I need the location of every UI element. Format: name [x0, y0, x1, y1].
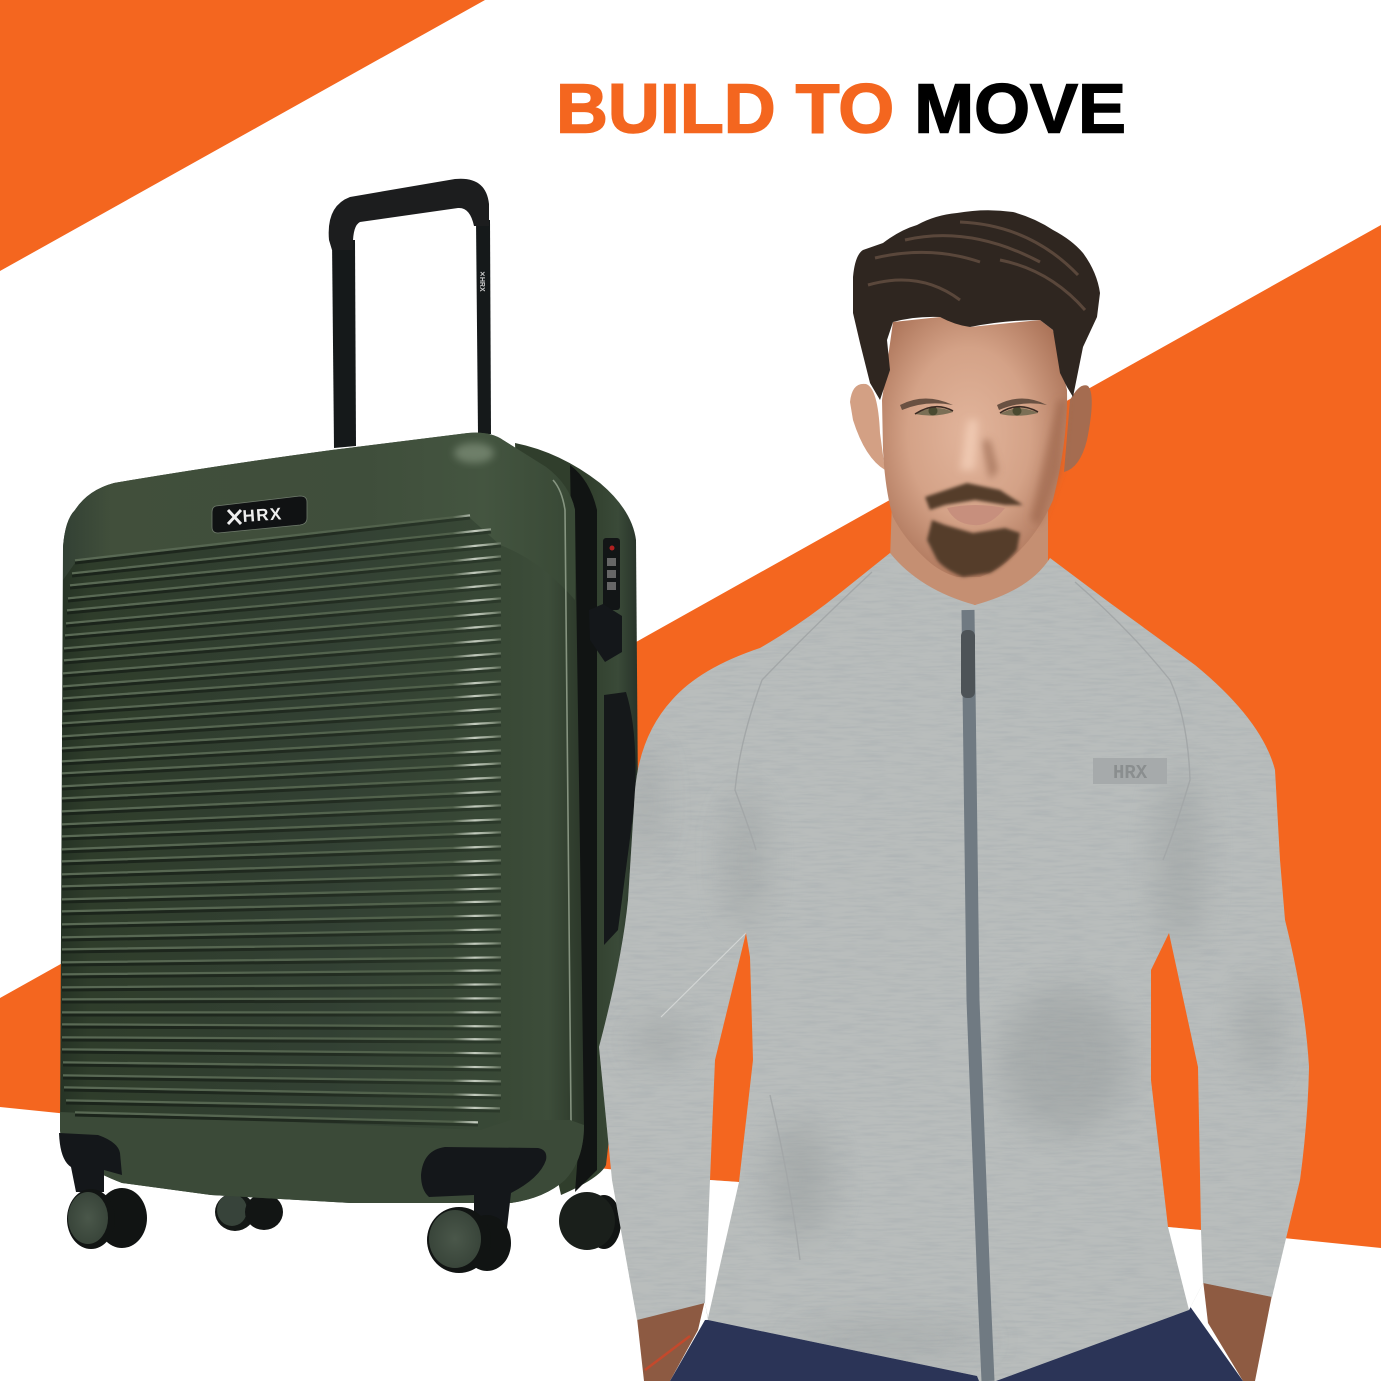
suitcase telescopic handle: ✕HRX [478, 271, 485, 292]
jacket zip [968, 610, 988, 1381]
man hair [853, 210, 1100, 400]
suitcase top panel [63, 433, 575, 600]
man lips [947, 505, 1005, 525]
jacket body [599, 553, 1309, 1381]
jacket forearm seam [661, 933, 746, 1017]
man [590, 210, 1320, 1381]
man neck [890, 500, 1048, 605]
suitcase combination lock [589, 538, 622, 662]
man face [882, 317, 1067, 577]
man left hand [637, 1300, 705, 1381]
man jacket [590, 545, 1320, 1381]
orange diagonal band [0, 225, 1381, 1248]
jacket zip pull [961, 630, 975, 698]
man ears [850, 384, 1092, 472]
man face shadows [960, 400, 1066, 525]
suitcase front edge highlight [553, 480, 571, 1158]
gap: left arm and torso [710, 933, 753, 1182]
man beard and moustache [925, 483, 1023, 577]
suitcase rear right wheel [559, 1192, 621, 1250]
suitcase zip strip [570, 465, 597, 1192]
suitcase telescopic handle [329, 179, 491, 448]
gap: white below left arm [705, 1180, 739, 1318]
suitcase HRX badge [212, 496, 307, 533]
suitcase rear middle wheels [215, 1193, 283, 1231]
jacket raglan seams [735, 572, 1190, 1260]
suitcase HRX badge: HRX [242, 504, 283, 526]
suitcase [59, 179, 638, 1273]
jacket chest logo [1093, 758, 1167, 784]
orange triangle: top left [0, 0, 485, 271]
man trousers [670, 1305, 1243, 1381]
jacket chest logo: HRX [1113, 762, 1148, 784]
gap: right arm and torso [1151, 933, 1201, 1230]
suitcase front shell [60, 433, 584, 1203]
man right hand [1203, 1280, 1272, 1381]
suitcase ribs [62, 515, 501, 1125]
gap: white below right arm [1168, 1227, 1203, 1310]
suitcase front left wheel [59, 1133, 147, 1249]
suitcase lower panel [60, 1112, 584, 1203]
man wrist band [645, 1336, 690, 1370]
suitcase top corner highlight [454, 443, 494, 463]
man eyes and brows [900, 398, 1047, 416]
jacket shading and heather texture [590, 545, 1320, 1381]
suitcase side shell [515, 443, 638, 1195]
suitcase front right wheel [421, 1147, 546, 1273]
suitcase side handle [604, 692, 636, 945]
title: BUILD TO MOVE [556, 70, 1126, 148]
